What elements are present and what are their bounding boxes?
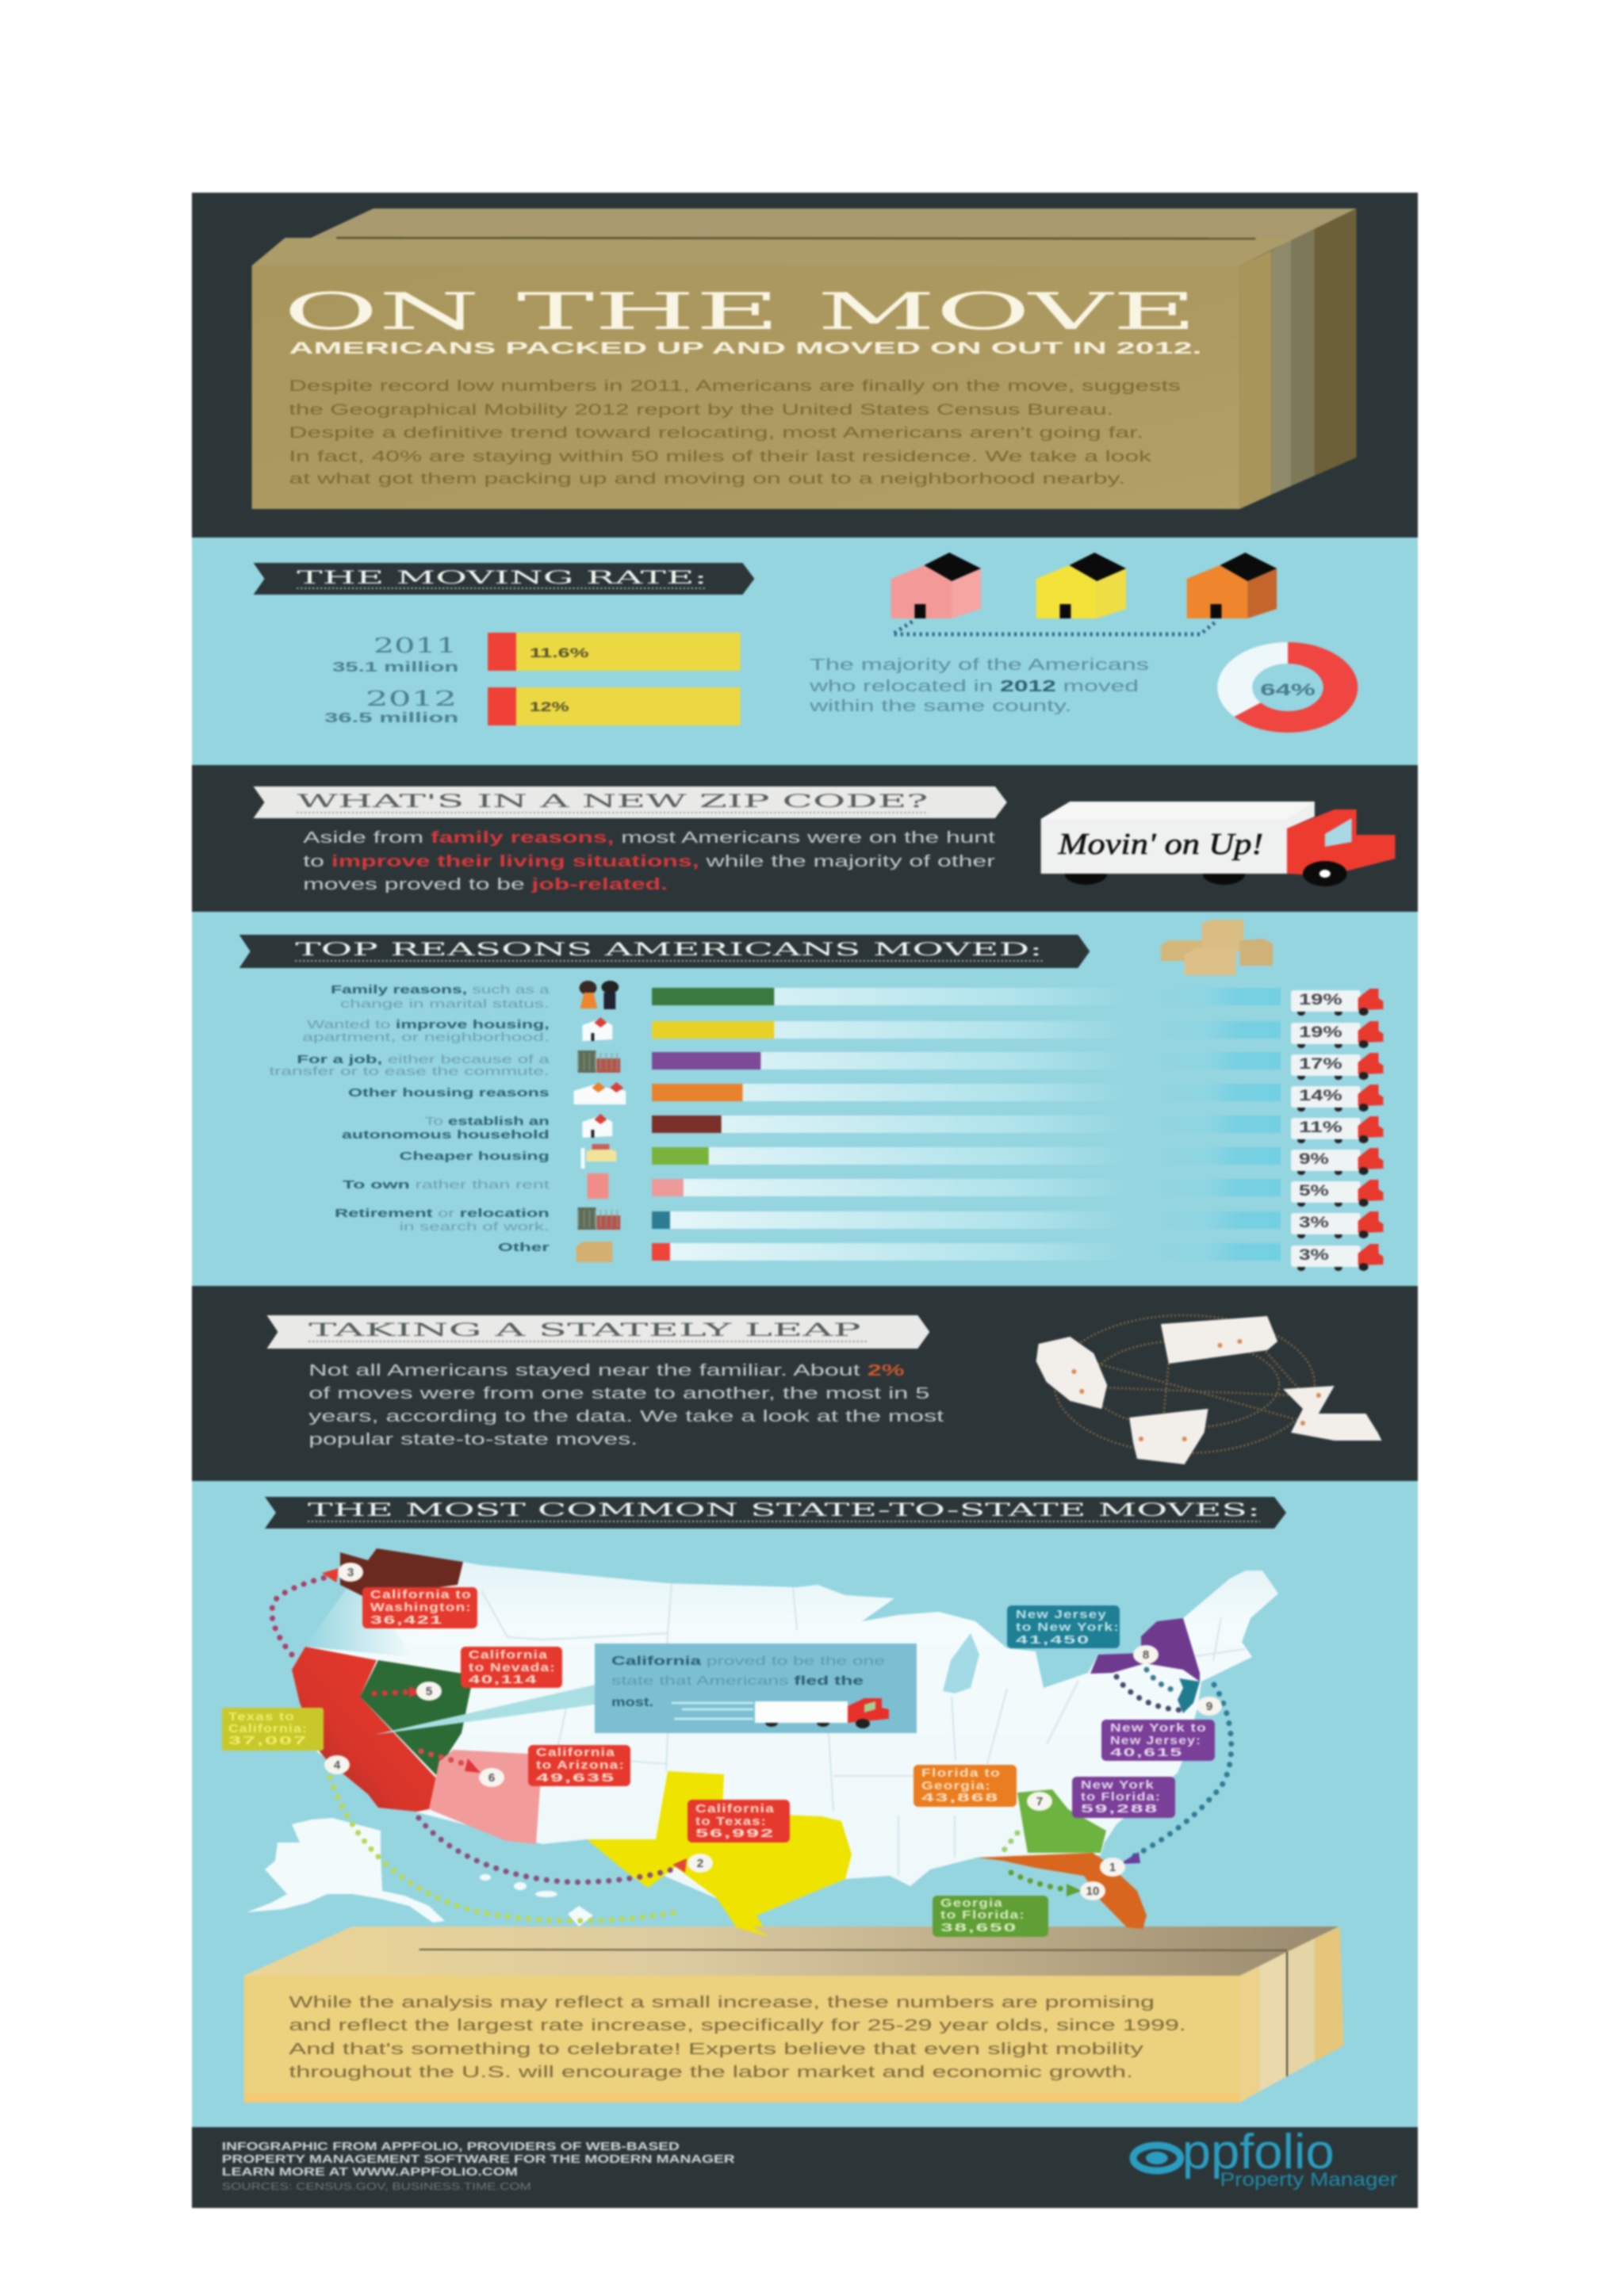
state borders [481,1583,1245,1876]
callout: California fled the most: state that Americans fled the [611,1674,864,1688]
logo: appfolio: Property Manager [1220,2169,1397,2191]
label: New York to Florida: to Florida: [1081,1790,1161,1804]
callout: California fled the most: California proved to be the one [611,1655,885,1668]
icon: small truck [672,1698,889,1728]
label: California to Washington: Washington: [370,1601,472,1614]
footer credits: SOURCES: CENSUS.GOV, BUSINESS.TIME.COM [222,2180,531,2192]
text: stately leap: of moves were from one state to another, the most in 5 [308,1385,929,1402]
label: New York to New Jersey: 40,615 [1110,1746,1183,1759]
label: Florida to Georgia: 43,868 [921,1791,999,1804]
icon: moving truck [1041,802,1395,886]
row: retirement 3%: Retirement or relocation [335,1207,550,1220]
cardboard box: closing [244,1927,1344,2103]
bar chart: top reasons [269,981,1383,1271]
text: closing summary: And that's something to celebrate! Experts believe that even slight mobility [289,2041,1143,2058]
label: California to Texas [688,1800,790,1843]
row: cheaper housing 9%: Cheaper housing [400,1150,550,1163]
title: ON THE MOVE [283,283,1197,342]
header intro text: Despite a definitive trend toward relocating, most Americans aren't going far. [289,425,1143,442]
route: California to Washington [272,1577,327,1655]
route: Nevada to Arizona [421,1751,473,1766]
heading: top reasons [239,935,1090,968]
state: Georgia [1017,1789,1106,1853]
label: New York to New Jersey: New Jersey: [1110,1734,1201,1747]
panel: state-to-state background [192,1481,1418,2127]
heading: the moving rate: THE MOVING RATE: [297,568,707,588]
state: Texas [587,1771,852,1937]
row: for a job 17%: transfer or to ease the commute. [269,1065,550,1078]
logo: appfolio: ppfolio [1182,2125,1335,2179]
panel: top reasons background [192,912,1418,1286]
panel: footer background [192,2127,1418,2208]
text: zip code [303,829,996,894]
badge 6 [479,1768,504,1787]
map: United States [247,1548,1278,1937]
route lines [272,1568,1231,1921]
badge 2: 2 [697,1857,703,1870]
row: establish a household 11%: To establish an [425,1115,550,1128]
panel: stately leap background [192,1286,1418,1481]
row: other 3%: 3% [1299,1247,1329,1264]
route: New Jersey to New York [1147,1670,1178,1691]
icon: yellow house [1036,553,1126,618]
donut chart: 64% [1217,642,1358,733]
subtitle: AMERICANS PACKED UP AND MOVED ON OUT IN 2012. [289,339,1202,358]
content: lower sections [222,1994,1397,2192]
row: for a job 17%: 17% [1299,1056,1342,1073]
bar 2012: 12% [530,699,569,714]
row: establish a household 11% [342,1114,1383,1143]
row: to own 5%: 5% [1299,1183,1329,1200]
route: New York to Florida [1128,1685,1231,1859]
heading: top reasons: TOP REASONS AMERICANS MOVED: [295,940,1043,960]
panel: header dark background [192,193,1418,538]
cardboard box: header [252,209,1357,509]
truck slogan: Movin' on Up! [1057,828,1263,861]
Texas tip over box [733,1925,769,1937]
header intro text: at what got them packing up and moving on out to a neighborhood nearby. [289,471,1125,488]
label: Texas to California: California: [228,1722,308,1735]
header intro text: the Geographical Mobility 2012 report by the United States Census Bureau. [289,402,1113,419]
logo: appfolio [1133,2125,1397,2191]
row: retirement 3%: 3% [1299,1215,1329,1231]
bar 2012 [488,687,741,725]
text: majority relocated: who relocated in 2012 moved [808,678,1139,695]
label: California to Arizona: California [536,1746,615,1759]
text: zip code: moves proved to be job-related. [303,876,668,894]
heading: most common state-to-state moves: THE MOST COMMON STATE-TO-STATE MOVES: [308,1501,1260,1521]
heading: taking a stately leap: TAKING A STATELY LEAP [308,1321,861,1341]
text: closing summary [289,1994,1186,2081]
label: Texas to California [222,1708,324,1751]
content: upper sections [239,209,1395,1464]
badge 2 [688,1854,713,1873]
label: New Jersey to New York: to New York: [1016,1621,1120,1634]
badge 1: 1 [1109,1861,1116,1874]
label: Georgia to Florida: Georgia [940,1896,1003,1910]
bar 2011 [488,633,741,671]
row: for a job 17%: For a job, either because of a [297,1053,550,1066]
state: Florida [977,1853,1147,1929]
icon: orange house [1187,553,1277,618]
badge 5: 5 [426,1685,432,1698]
badge 10 [1080,1881,1105,1900]
lake michigan [943,1633,979,1693]
heading: taking a stately leap [267,1315,929,1349]
badge 4: 4 [334,1758,341,1772]
badge 4 [324,1755,350,1774]
row: improve housing 19%: 19% [1299,1024,1342,1041]
badge 9: 9 [1206,1700,1212,1713]
route: New York to New Jersey [1116,1677,1182,1710]
label: New Jersey to New York: 41,450 [1016,1633,1090,1647]
year label 2011: 2011 [373,634,457,658]
badge 3: 3 [347,1566,354,1579]
row: to own 5%: To own rather than rent [343,1178,550,1192]
state: California [292,1647,437,1812]
row: improve housing 19%: apartment, or neighborhood. [302,1031,550,1044]
text: zip code: Aside from family reasons, most Americans were on the hunt [303,829,996,847]
text: closing summary: throughout the U.S. will encourage the labor market and economic growth. [289,2064,1133,2081]
row: other housing reasons 14% [348,1082,1383,1112]
badge 9 [1197,1697,1222,1716]
text: closing summary: While the analysis may reflect a small increase, these numbers are promising [289,1994,1155,2011]
badge 5 [416,1682,442,1701]
label 35.1 million: 35.1 million [332,659,458,675]
label: Georgia to Florida: to Florida: [940,1908,1025,1922]
badge 8 [1133,1645,1159,1664]
text: stately leap: Not all Americans stayed near the familiar. About 2% [308,1362,905,1380]
row: cheaper housing 9%: 9% [1299,1151,1329,1168]
Florida tip over box [1125,1925,1144,1929]
row: establish a household 11%: autonomous household [342,1128,550,1142]
icon: pink house [891,553,981,618]
route number badges [324,1563,1222,1900]
header intro text: In fact, 40% are staying within 50 miles of their last residence. We take a look [289,449,1152,465]
label: California to Texas: California [695,1802,775,1816]
state: Nevada [360,1660,473,1776]
text: majority relocated: within the same county. [808,698,1071,715]
label: California to Arizona [528,1745,630,1786]
row: improve housing 19% [302,1017,1383,1048]
row: family reasons 19% [331,981,1383,1016]
label: California to Nevada: to Nevada: [469,1661,556,1674]
row: family reasons 19%: Family reasons, such as a [331,983,550,997]
label: California to Washington: 36,421 [370,1613,443,1627]
callout: California fled the most [374,1644,917,1735]
label: Georgia to Florida: 38,650 [940,1921,1017,1934]
label: Florida to Georgia: Florida to [921,1766,1001,1780]
label: California to Texas: 56,992 [695,1827,775,1840]
row: for a job 17% [269,1050,1383,1080]
row: other 3% [498,1241,1383,1271]
panel: moving rate background [192,538,1418,765]
footer credits: LEARN MORE AT WWW.APPFOLIO.COM [222,2165,518,2179]
heading: most common state-to-state moves [265,1497,1286,1529]
text: majority relocated [808,656,1149,715]
heading: what's in a new zip code [254,786,1007,818]
route arrowheads [322,1568,1140,1896]
route: Georgia to Florida [1011,1873,1076,1891]
row: to own 5% [343,1173,1383,1207]
label: Texas to California: 37,007 [228,1734,308,1747]
west coast fade [305,1586,412,1657]
badge 6: 6 [488,1771,495,1785]
route: California to Nevada [374,1692,411,1693]
label: Georgia to Florida [933,1896,1048,1937]
route: Texas to California [330,1777,676,1921]
icon: four states with routes [1036,1315,1381,1464]
icon: stack of boxes [1161,920,1273,975]
heading: what's in a new zip code: WHAT'S IN A NEW ZIP CODE? [297,792,928,812]
row: retirement 3% [335,1207,1383,1238]
state: Alaska [247,1818,445,1923]
state: New York [1090,1618,1200,1682]
footer credits: PROPERTY MANAGEMENT SOFTWARE FOR THE MODERN MANAGER [222,2152,735,2166]
text: zip code: to improve their living situations, while the majority of other [303,853,995,871]
panel: zip code background [192,765,1418,912]
row: other housing reasons 14%: Other housing reasons [348,1086,550,1100]
callout: California fled the most: most. [611,1696,653,1709]
row: other housing reasons 14%: 14% [1299,1088,1342,1104]
text: closing summary: and reflect the largest rate increase, specifically for 25-29 year olds, since 1999. [289,2017,1186,2034]
label: New York to Florida: New York [1081,1778,1155,1792]
label: Florida to Georgia: Georgia: [921,1779,991,1793]
donut chart: 64%: 64% [1260,681,1316,699]
label: New York to New Jersey [1101,1720,1215,1761]
year label 2012: 2012 [366,687,457,711]
label: California to Nevada: 40,114 [469,1673,538,1686]
route: California to Texas [419,1818,680,1882]
state: Arizona [429,1750,542,1844]
label: California to Arizona: 49,635 [536,1771,615,1785]
badge 7: 7 [1036,1795,1043,1808]
row: family reasons 19%: change in marital status. [340,997,550,1011]
text: stately leap [308,1362,944,1448]
heading: the moving rate [254,563,754,595]
label: New York to New Jersey: New York to [1110,1721,1207,1735]
state: Hawaii [480,1874,593,1927]
text: stately leap: popular state-to-state moves. [308,1431,638,1448]
label: California to Arizona: to Arizona: [536,1758,625,1772]
footer credits [222,2140,735,2192]
row: retirement 3%: in search of work. [400,1220,550,1234]
state: Washington [340,1548,463,1597]
row: family reasons 19%: 19% [1299,992,1342,1008]
label: Florida to Georgia [914,1765,1017,1807]
row: cheaper housing 9% [400,1144,1383,1175]
label: New Jersey to New York: New Jersey [1016,1608,1107,1621]
label: Texas to California: Texas to [228,1710,295,1724]
header intro text [289,378,1181,488]
label: California to Texas: to Texas: [695,1815,767,1828]
header intro text: Despite record low numbers in 2011, Americans are finally on the move, suggests [289,378,1181,395]
footer credits: INFOGRAPHIC FROM APPFOLIO, PROVIDERS OF WEB-BASED [222,2140,680,2153]
label: California to Nevada [461,1647,562,1688]
label: New York to Florida: 59,288 [1081,1802,1159,1816]
row: other 3%: Other [498,1241,550,1254]
label: California to Washington: California to [370,1588,472,1601]
text: majority relocated: The majority of the Americans [810,656,1149,674]
badge 8: 8 [1143,1648,1149,1662]
map outline [292,1548,1278,1915]
text: stately leap: years, according to the data. We take a look at the most [308,1408,944,1425]
badge 3 [338,1563,363,1582]
row: establish a household 11%: 11% [1299,1119,1342,1136]
icon: three houses [891,553,1277,634]
label: California to Nevada: California [469,1648,548,1662]
state: New Jersey [1178,1678,1200,1713]
label: California to Washington [362,1587,477,1628]
badge 10: 10 [1086,1885,1099,1898]
label 36.5 million: 36.5 million [324,710,458,725]
label: New York to Florida [1072,1777,1175,1818]
label: New Jersey to New York [1007,1605,1120,1648]
bar 2011: 11.6% [530,645,588,660]
bar chart: moving rate [324,633,741,725]
badge 1 [1100,1858,1125,1877]
route: Florida to Georgia [1003,1833,1017,1851]
row: improve housing 19%: Wanted to improve housing, [307,1018,550,1031]
badge 7 [1027,1792,1052,1811]
